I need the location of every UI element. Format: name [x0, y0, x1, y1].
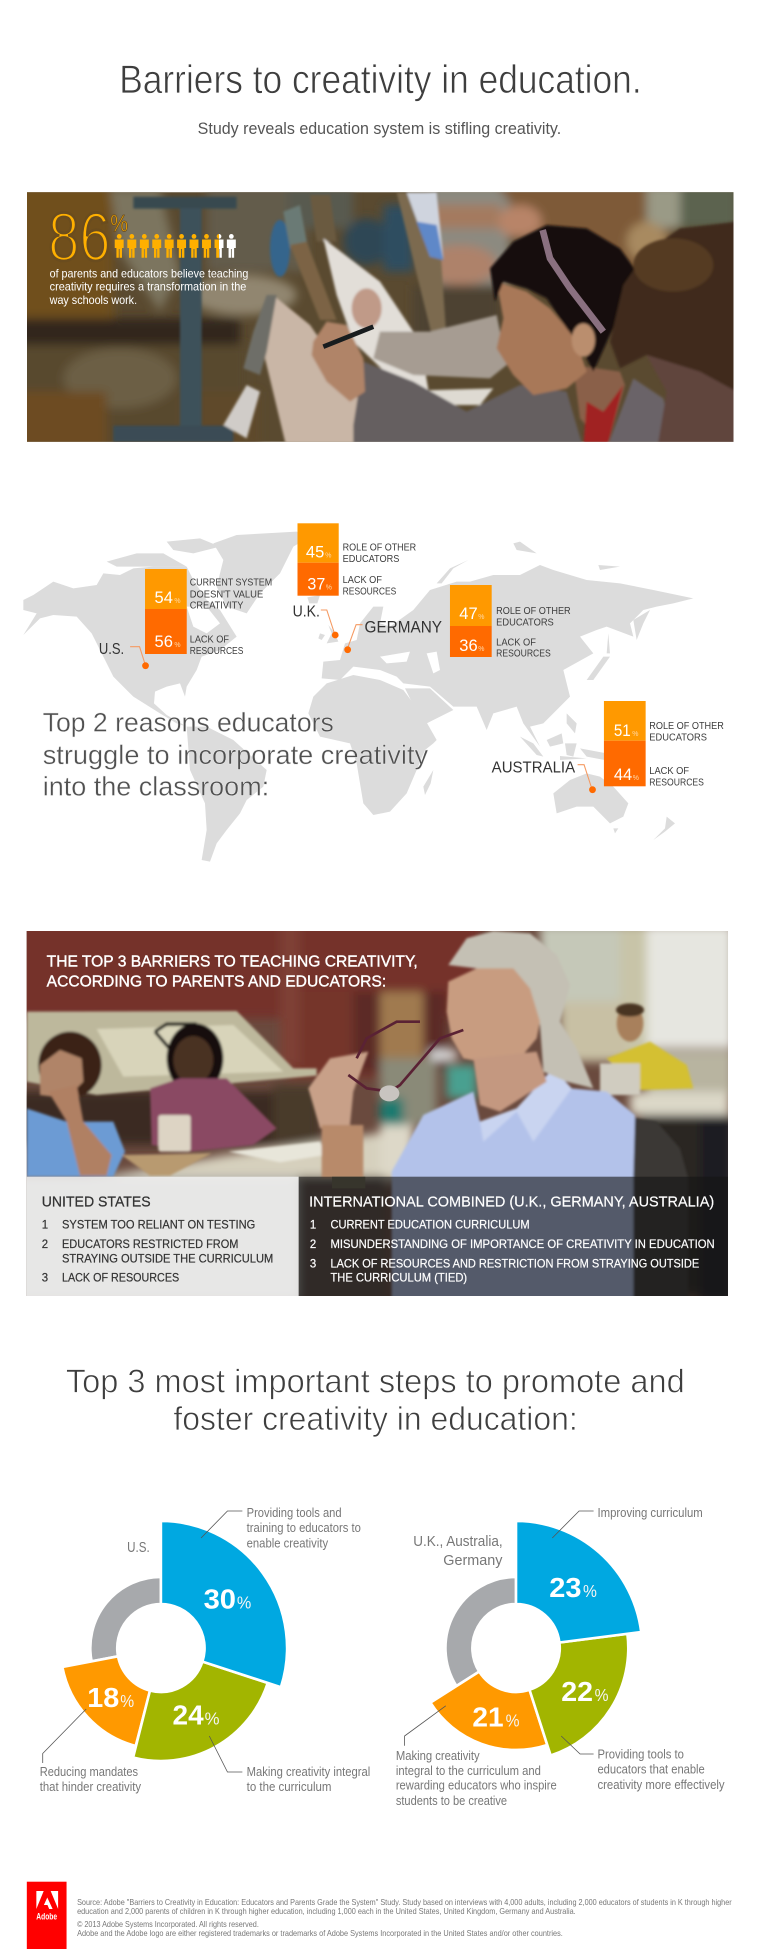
country label: U.K.: U.K.	[293, 604, 320, 621]
value: 24%: %	[205, 1708, 220, 1728]
subtitle: Study reveals education system is stifling creativity.	[198, 120, 561, 138]
labels: Germany reasons: EDUCATORS	[496, 617, 554, 628]
callout: making creativity integral and rewarding	[396, 1706, 557, 1808]
heading: top 3 steps	[66, 1362, 685, 1437]
bar: U.S. values: %	[174, 642, 181, 649]
callout: providing tools to educators: educators that enable	[597, 1763, 705, 1777]
callout: providing tools to educators: creativity more effectively	[597, 1778, 725, 1792]
chart: U.K., Australia, Germany donut	[396, 1506, 725, 1808]
country label: U.S.: U.S.	[99, 641, 124, 658]
labels: Australia reasons: RESOURCES	[649, 778, 704, 789]
bar: U.K. values: %	[325, 553, 331, 560]
callout: providing tools: enable creativity	[247, 1536, 329, 1550]
value: 22%: %	[595, 1685, 609, 1705]
value: 23%: 23	[549, 1572, 581, 1603]
labels: U.S. reasons	[190, 578, 272, 657]
heading: top 2 reasons: struggle to incorporate creativity	[43, 740, 429, 770]
heading: top 2 reasons: Top 2 reasons educators	[43, 708, 334, 738]
text: 86% explanation: creativity requires a transformation in the	[50, 282, 246, 294]
bar: U.K. values	[297, 523, 339, 596]
heading: top 2 reasons: into the classroom:	[43, 772, 269, 802]
list: United States: 3	[42, 1273, 48, 1285]
list: International combined: MISUNDERSTANDING OF IMPORTANCE OF CREATIVITY IN EDUCATION	[330, 1239, 715, 1251]
marker: Australia	[578, 765, 596, 793]
callout: making creativity integral	[209, 1736, 370, 1794]
segments: international	[430, 1521, 641, 1756]
list: International combined: LACK OF RESOURCES AND RESTRICTION FROM STRAYING OUTSIDE	[330, 1258, 700, 1270]
segments: U.S.	[62, 1521, 287, 1761]
bar: Australia values	[604, 701, 646, 786]
list: International combined: 3	[310, 1258, 316, 1270]
value: 21%: 21	[472, 1701, 504, 1732]
callout: making creativity integral and rewarding: students to be creative	[396, 1794, 507, 1808]
callout: providing tools to educators	[561, 1736, 725, 1792]
value: 18%	[87, 1682, 134, 1713]
labels: U.S. reasons: CURRENT SYSTEM	[190, 578, 272, 589]
callout: making creativity integral: Making creativity integral	[247, 1765, 370, 1779]
callout: U.K.	[293, 523, 416, 638]
icon: Adobe logo: Adobe	[36, 1911, 57, 1921]
callout: making creativity integral and rewarding: Making creativity	[396, 1749, 480, 1763]
value: 22%: 22	[561, 1676, 593, 1707]
labels: U.K. reasons: EDUCATORS	[343, 554, 400, 565]
text: 86% explanation: of parents and educators believe teaching	[50, 268, 248, 281]
chart: U.S. donut	[40, 1506, 370, 1794]
list: International combined: 1	[310, 1220, 316, 1232]
heading: top 3 steps: foster creativity in education:	[173, 1400, 578, 1437]
bar: U.S. values: %	[174, 598, 181, 605]
value: 24%: 24	[173, 1699, 204, 1730]
bar: Australia values: %	[633, 775, 639, 782]
value: 30%	[204, 1584, 251, 1615]
labels: U.S. reasons: RESOURCES	[190, 646, 244, 657]
photo: students drawing at easels	[13, 185, 737, 452]
bar: Germany values: %	[478, 614, 484, 621]
footer: source and legal text: © 2013 Adobe Systems Incorporated. All rights reserved.	[77, 1920, 259, 1929]
callout: reducing mandates: Reducing mandates	[40, 1765, 138, 1779]
labels: U.S. reasons: DOESN'T VALUE	[190, 589, 264, 600]
bar: Australia values: %	[632, 731, 638, 738]
stat: 86%: %	[110, 210, 128, 238]
country label: Germany: GERMANY	[365, 618, 442, 636]
callout: making creativity integral and rewarding: integral to the curriculum and	[396, 1764, 541, 1778]
list: International combined: CURRENT EDUCATION CURRICULUM	[330, 1220, 530, 1232]
value: 23%: %	[583, 1581, 597, 1601]
text: 86% explanation	[49, 268, 248, 307]
callout: improving curriculum	[552, 1506, 703, 1538]
value: 18%: 18	[87, 1682, 119, 1713]
label: U.K., Australia, Germany: U.K., Australia,	[413, 1533, 503, 1550]
callout: providing tools to educators: Providing tools to	[597, 1748, 684, 1762]
text: 86% explanation: way schools work.	[49, 295, 137, 307]
marker: U.S.	[130, 647, 149, 669]
callout: Australia	[492, 701, 724, 793]
labels: U.S. reasons: LACK OF	[190, 634, 229, 645]
stat: 86%: 86	[48, 198, 110, 276]
heading: top 3 barriers: THE TOP 3 BARRIERS TO TEACHING CREATIVITY,	[47, 954, 418, 971]
callout: reducing mandates: that hinder creativity	[40, 1780, 142, 1794]
bar: U.S. values: 56	[155, 632, 173, 651]
country label: Australia: AUSTRALIA	[492, 760, 575, 777]
value: 22%	[561, 1676, 609, 1707]
labels: U.K. reasons	[343, 543, 416, 597]
callout: Germany	[344, 585, 571, 660]
callout: making creativity integral: to the curriculum	[247, 1780, 331, 1794]
label: U.K., Australia, Germany	[413, 1533, 503, 1569]
bar: U.K. values: 45	[306, 543, 324, 562]
callout: U.S.	[99, 569, 272, 669]
bar: U.K. values: %	[326, 584, 332, 591]
bar: U.S. values: 54	[155, 588, 173, 607]
icon row: people, 86 percent coloured	[115, 234, 236, 258]
icon: Adobe logo	[27, 1882, 67, 1949]
label: U.S.: U.S.	[127, 1539, 150, 1556]
labels: U.K. reasons: RESOURCES	[343, 586, 397, 597]
callout: making creativity integral and rewarding: rewarding educators who inspire	[396, 1779, 557, 1793]
bar: U.K. values: 37	[307, 574, 325, 593]
bar: Germany values: 47	[459, 604, 478, 623]
marker: U.K.	[321, 610, 339, 638]
value: 23%	[549, 1572, 597, 1603]
world map	[23, 532, 693, 862]
list: International combined: INTERNATIONAL COMBINED (U.K., GERMANY, AUSTRALIA)	[309, 1194, 714, 1211]
value: 18%: %	[120, 1691, 134, 1711]
value: 30%: %	[237, 1593, 251, 1613]
list: United States	[42, 1194, 273, 1285]
labels: Australia reasons	[649, 721, 724, 789]
value: 30%: 30	[204, 1584, 236, 1615]
bar: Germany values: %	[478, 646, 484, 653]
value: 21%: %	[506, 1710, 520, 1730]
callout: providing tools	[201, 1506, 361, 1550]
list: United States: EDUCATORS RESTRICTED FROM	[62, 1239, 238, 1251]
list: United States: UNITED STATES	[42, 1194, 151, 1211]
labels: U.K. reasons: ROLE OF OTHER	[343, 543, 416, 554]
list: United States: LACK OF RESOURCES	[62, 1273, 180, 1285]
list: International combined	[309, 1194, 715, 1285]
bar: U.S. values	[145, 569, 187, 654]
heading: top 3 barriers: ACCORDING TO PARENTS AND EDUCATORS:	[47, 974, 386, 991]
footer: source and legal text	[77, 1898, 732, 1938]
labels: U.S. reasons: CREATIVITY	[190, 601, 244, 612]
list: International combined: THE CURRICULUM (TIED)	[330, 1273, 467, 1285]
bar: Germany values: 36	[459, 636, 478, 655]
heading: top 2 reasons	[43, 708, 429, 802]
list: International combined: 2	[310, 1239, 316, 1251]
heading: top 3 steps: Top 3 most important steps to promote and	[66, 1362, 685, 1399]
labels: Germany reasons	[496, 606, 571, 660]
footer: source and legal text: Adobe and the Adobe logo are either registered trademarks or trademarks of Adobe Systems Incorporated in the United States and/or other countries.	[77, 1929, 563, 1938]
callout: improving curriculum: Improving curriculum	[597, 1506, 703, 1520]
labels: Australia reasons: ROLE OF OTHER	[649, 721, 724, 732]
labels: Germany reasons: LACK OF	[496, 638, 536, 649]
bar: Germany values	[450, 585, 492, 657]
labels: Australia reasons: LACK OF	[649, 766, 689, 777]
labels: U.K. reasons: LACK OF	[343, 575, 382, 586]
heading: top 3 barriers	[47, 954, 418, 991]
title: Barriers to creativity in education.	[119, 58, 642, 102]
value: 24%	[173, 1699, 220, 1730]
callout: reducing mandates	[40, 1709, 142, 1794]
panel background: International	[299, 1177, 728, 1296]
footer: source and legal text: education and 2,000 parents of children in K through higher education, including 1,000 each in the United States, United Kingdom, Germany and Australia.	[77, 1907, 576, 1916]
value: 21%	[472, 1701, 520, 1732]
callout: providing tools: training to educators to	[247, 1521, 361, 1535]
panel: art class photo with 86% statistic	[13, 185, 737, 452]
panel background: United States	[27, 1177, 299, 1296]
list: United States: SYSTEM TOO RELIANT ON TESTING	[62, 1220, 255, 1232]
labels: Germany reasons: ROLE OF OTHER	[496, 606, 571, 617]
photo: classroom with woman holding glasses	[13, 918, 733, 1302]
marker: Germany	[344, 625, 363, 653]
labels: Germany reasons: RESOURCES	[496, 649, 551, 660]
list: United States: 2	[42, 1239, 48, 1251]
bar: Australia values: 44	[614, 765, 632, 784]
label: U.K., Australia, Germany: Germany	[443, 1552, 503, 1569]
bar: Australia values: 51	[614, 721, 631, 740]
callout: providing tools: Providing tools and	[247, 1506, 342, 1520]
panel: top 3 barriers photo	[13, 918, 733, 1302]
list: United States: 1	[42, 1220, 48, 1232]
labels: Australia reasons: EDUCATORS	[649, 732, 707, 743]
list: United States: STRAYING OUTSIDE THE CURRICULUM	[62, 1253, 273, 1265]
